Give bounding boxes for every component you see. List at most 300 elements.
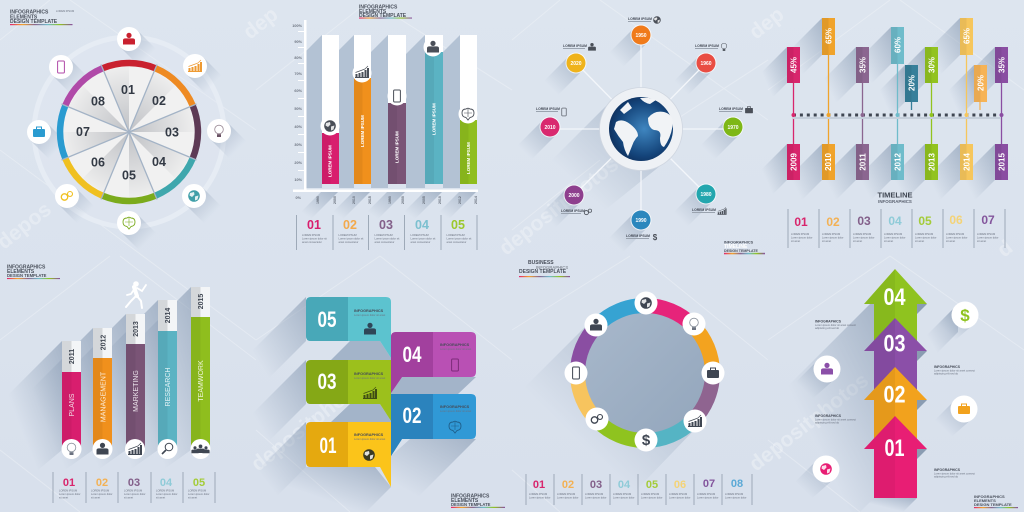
- legend row: Lorem ipsum dolor: [853, 236, 875, 240]
- title: business infographics: INFOGRAPHICS: [536, 265, 568, 270]
- runner figure: [126, 281, 146, 308]
- column 2014 research: 2014: [165, 308, 172, 323]
- legend row: LOREM IPSUM: [585, 492, 603, 496]
- legend row: LOREM IPSUM: [697, 492, 715, 496]
- arrow 01 pink: [864, 416, 927, 498]
- text block: lower left: [815, 414, 856, 424]
- ring segments: [578, 306, 712, 440]
- node 1950: [630, 24, 652, 46]
- heading: timeline infographics: INFOGRAPHICS: [878, 199, 912, 204]
- node shadows: [505, 28, 740, 265]
- year tag 2011: 2011: [858, 153, 868, 171]
- title: business infographics: DESIGN TEMPLATE: [519, 269, 567, 275]
- node labels: LOREM IPSUM: [695, 44, 719, 48]
- icon: gears: [61, 192, 72, 200]
- icon: magnifier: [162, 443, 173, 454]
- x axis labels: 2010: [352, 196, 356, 204]
- title: infographics timeline: INFOGRAPHICS: [724, 240, 754, 244]
- heading: timeline infographics: [878, 190, 912, 204]
- globe long shadow: [522, 100, 670, 238]
- y axis labels: 100%: [292, 24, 303, 28]
- legend row: sit amet: [124, 496, 133, 500]
- legend row: Lorem ipsum dolor: [188, 492, 210, 496]
- wedge numbers: [76, 83, 179, 182]
- arrow 03 purple: 03: [884, 330, 906, 358]
- title: infographics elements (bubbles): DESIGN TEMPLATE: [451, 502, 491, 507]
- tag 35% purple: [995, 47, 1008, 83]
- legend row: Lorem ipsum dolor: [156, 492, 178, 496]
- legend row: LOREM IPSUM: [613, 492, 631, 496]
- column 2012 management: MANAGEMENT: [100, 371, 108, 422]
- bar 2 orange: LOREM IPSUM: [360, 115, 365, 147]
- text block: upper left: INFOGRAPHICS: [815, 320, 842, 324]
- arrow 01 pink: 01: [884, 435, 904, 462]
- legend row: LOREM IPSUM: [124, 488, 142, 492]
- panel: timeline: [757, 18, 1008, 248]
- legend row: LOREM IPSUM: [446, 233, 465, 237]
- tag 30%: 30%: [928, 57, 936, 73]
- title: infographics elements (wheel): ELEMENTS: [10, 14, 38, 20]
- ring inner disc: [583, 311, 707, 435]
- icon: dollar: $: [642, 432, 651, 449]
- arrow shadows: [770, 300, 958, 512]
- title: infographics elements (wheel): DESIGN TEMPLATE: [10, 19, 58, 25]
- tag 20% orange: [974, 65, 987, 102]
- node 1960: [696, 52, 716, 74]
- timeline shadows: [757, 18, 995, 220]
- legend row: sit amet: [59, 496, 68, 500]
- bubble 02 blue: 02: [402, 403, 422, 428]
- title: infographics timeline: DESIGN TEMPLATE: [724, 249, 758, 253]
- icon: globe: [188, 190, 200, 202]
- bar 5 green: [458, 35, 478, 184]
- x axis labels: 1990: [388, 196, 392, 204]
- node 2020: 2020: [570, 61, 582, 67]
- timeline dotted axis: [792, 113, 1004, 119]
- legend row: sit amet: [791, 239, 800, 243]
- title: infographics elements (bars): [359, 4, 412, 19]
- icon: person: [96, 443, 108, 454]
- text block: upper left: adipiscing elit sed do: [815, 326, 840, 330]
- node labels: LOREM IPSUM: [626, 234, 650, 238]
- tag 30%: [925, 47, 938, 83]
- legend row: sit amet: [946, 239, 955, 243]
- legend row: 05: [918, 214, 932, 228]
- icon shadows: [30, 30, 254, 258]
- node labels: LOREM IPSUM: [719, 107, 743, 111]
- tag 20% orange: 20%: [976, 75, 986, 91]
- icon: person: [590, 319, 602, 330]
- x axis labels: 1990: [316, 196, 320, 204]
- node 1990: [630, 210, 652, 230]
- watermark text: depositphotos: [745, 369, 873, 476]
- legend row: [296, 215, 477, 250]
- year tag 2012: [891, 144, 904, 180]
- watermark text: d: [993, 236, 1017, 262]
- y axis labels: 60%: [294, 89, 303, 93]
- panel: percentage bar chart: [284, 4, 478, 250]
- legend row: Lorem ipsum dolor: [697, 496, 719, 500]
- legend row: [788, 209, 1005, 248]
- y axis labels: 10%: [294, 178, 303, 182]
- wedge numbers: 03: [165, 126, 179, 140]
- legend row: amet consectetur: [302, 240, 322, 244]
- bar shadows: [306, 35, 460, 188]
- legend row: LOREM IPSUM: [669, 492, 687, 496]
- y axis labels: 70%: [294, 72, 303, 76]
- tag 45%: [787, 47, 800, 83]
- bubble 01 yellow: Lorem ipsum dolor sit amet: [354, 437, 386, 441]
- text block: lower left: INFOGRAPHICS: [815, 414, 842, 418]
- legend row: Lorem ipsum dolor: [977, 236, 999, 240]
- year tag 2013: [925, 144, 938, 180]
- bar 4 teal: LOREM IPSUM: [432, 103, 436, 135]
- icon: brain: [123, 217, 135, 229]
- title: infographics elements (columns): INFOGRAPHICS: [7, 264, 46, 270]
- bubble 05 teal: [306, 297, 391, 358]
- legend row: LOREM IPSUM: [853, 232, 871, 236]
- year tag 2012: 2012: [894, 153, 902, 171]
- year tag 2014: [960, 144, 973, 180]
- bubble 03 green: INFOGRAPHICS: [354, 372, 384, 376]
- legend row: Lorem ipsum dolor: [59, 492, 81, 496]
- legend row: Lorem ipsum dolor: [91, 492, 113, 496]
- icon: bulb: [67, 443, 76, 455]
- circle: person: [814, 356, 840, 382]
- legend row: sit amet: [853, 239, 862, 243]
- column 2013 marketing: MARKETING: [133, 370, 140, 412]
- title: infographics elements (bubbles): ELEMENTS: [451, 498, 479, 504]
- legend row: 05: [193, 477, 205, 489]
- node 1990: 1990: [635, 218, 647, 224]
- legend row: Lorem ipsum dolor: [946, 236, 968, 240]
- text block: upper left: Lorem ipsum dolor sit amet consect: [815, 323, 856, 327]
- node 2020: [566, 52, 586, 74]
- tag 65%: 65%: [824, 28, 834, 44]
- legend row: amet consectetur: [338, 240, 359, 244]
- title: infographics elements (arrows): [974, 494, 1018, 508]
- title: infographics elements (bars): INFOGRAPHICS: [359, 4, 398, 10]
- node 2000: 2000: [568, 193, 580, 199]
- x axis labels: 2000: [333, 196, 337, 204]
- bubble 01 yellow: [306, 422, 391, 487]
- bubble 03 green: [306, 360, 391, 421]
- column 2012 management: 2012: [100, 335, 108, 350]
- column 2011 plans: 2011: [69, 349, 76, 364]
- node 2010: [540, 116, 560, 138]
- x axis labels: 2015: [368, 196, 372, 204]
- year tag 2015: [995, 144, 1008, 180]
- wedge numbers: 07: [76, 125, 90, 139]
- text block: upper right: Lorem ipsum dolor sit amet consect: [934, 368, 975, 372]
- bubble 02 blue: INFOGRAPHICS: [440, 405, 470, 409]
- bubble 04 magenta: 04: [402, 342, 422, 367]
- node labels: $: [653, 233, 658, 242]
- title: infographics elements (columns): DESIGN TEMPLATE: [7, 273, 47, 278]
- node labels: LOREM IPSUM: [563, 44, 587, 48]
- arrow 03 purple: [864, 318, 927, 395]
- legend row: amet consectetur: [410, 240, 431, 244]
- arrow 04 green: [864, 269, 927, 345]
- legend row: sit amet: [156, 496, 165, 500]
- connector lines: [550, 35, 733, 220]
- legend row: sit amet: [915, 239, 924, 243]
- tag 65%: [822, 18, 835, 55]
- y axis labels: 40%: [294, 125, 303, 129]
- text block: lower left: Lorem ipsum dolor sit amet consect: [815, 418, 856, 422]
- x axis labels: [316, 196, 478, 204]
- icon: bulb: [690, 318, 698, 330]
- bubble 05 teal: Lorem ipsum dolor sit amet: [354, 313, 386, 317]
- title: infographics elements (columns): ELEMENTS: [7, 269, 35, 275]
- icon: gears: [591, 414, 602, 423]
- x axis labels: 2010: [438, 196, 442, 204]
- halo ring: [34, 37, 224, 227]
- bubble 04 magenta: Lorem ipsum dolor sit amet: [440, 347, 472, 351]
- node labels: LOREM IPSUM: [628, 17, 652, 21]
- y axis labels: 30%: [294, 143, 303, 147]
- bubble 01 yellow: INFOGRAPHICS: [354, 433, 384, 437]
- panel: pie wheel infographic: [10, 9, 254, 258]
- x axis labels: 2005: [422, 196, 426, 204]
- legend row: 08: [731, 478, 743, 490]
- legend row: LOREM IPSUM: [977, 232, 995, 236]
- tag 35%: 35%: [858, 57, 868, 73]
- legend row: [526, 474, 752, 505]
- title: infographics elements (arrows): ELEMENTS: [974, 498, 996, 503]
- year tag 2009: [787, 144, 800, 180]
- legend row: Lorem ipsum dolor sit: [338, 236, 364, 240]
- circle: dollar: $: [960, 306, 970, 325]
- column 2011 plans: PLANS: [69, 393, 76, 416]
- bubble 03 green: 03: [318, 369, 336, 394]
- icon: team: [191, 445, 210, 453]
- year tag 2010: 2010: [824, 153, 833, 171]
- node labels: LOREM IPSUM: [536, 107, 560, 111]
- legend row: amet consectetur: [374, 240, 395, 244]
- legend row: 06: [674, 479, 686, 491]
- bubble shadows: [236, 297, 476, 512]
- legend row: 04: [415, 218, 429, 232]
- text block: lower right: adipiscing elit sed do: [934, 474, 959, 478]
- title: infographics timeline: TIMELINE: [724, 244, 748, 250]
- year tag 2009: 2009: [790, 153, 798, 171]
- legend row: 01: [533, 479, 545, 491]
- legend row: Lorem ipsum dolor: [725, 496, 747, 500]
- tag 60%: 60%: [894, 37, 902, 53]
- arrow 02 orange: [864, 367, 927, 440]
- legend row: Lorem ipsum dolor: [529, 496, 551, 500]
- y axis labels: 80%: [294, 56, 303, 60]
- legend row: sit amet: [884, 239, 893, 243]
- watermark text: depositphotos: [247, 369, 375, 476]
- legend row: 04: [160, 477, 173, 489]
- legend row: [53, 472, 215, 503]
- bubble 03 green: Lorem ipsum dolor sit amet: [354, 376, 386, 380]
- legend row: 03: [857, 214, 871, 228]
- x axis labels: 2012: [458, 196, 462, 204]
- title: infographics elements (arrows): INFOGRAPHICS: [974, 494, 1005, 499]
- globe: [600, 88, 682, 170]
- ring shadow: [500, 320, 698, 510]
- legend row: Lorem ipsum dolor sit: [302, 236, 327, 240]
- column 2014 research: RESEARCH: [165, 368, 172, 406]
- node 1960: 1960: [700, 61, 712, 67]
- text block: lower right: Lorem ipsum dolor sit amet consect: [934, 472, 975, 476]
- text block: lower left: adipiscing elit sed do: [815, 420, 840, 424]
- node labels: [536, 16, 753, 242]
- panel: speech bubbles: [236, 297, 505, 512]
- bar 3 mauve: [388, 35, 406, 184]
- y axis labels: 50%: [294, 107, 303, 111]
- x axis labels: 2000: [401, 196, 405, 204]
- legend row: Lorem ipsum dolor: [669, 496, 691, 500]
- y axis labels: 0%: [296, 196, 302, 200]
- timeline stems: [794, 55, 1002, 144]
- circle: briefcase: [950, 396, 978, 422]
- title: infographics timeline: [724, 240, 765, 254]
- legend row: LOREM IPSUM: [188, 488, 206, 492]
- legend row: 07: [703, 478, 715, 490]
- node 1980: 1980: [700, 192, 712, 198]
- node 1970: [722, 116, 744, 138]
- title: infographics elements (bubbles): [451, 494, 505, 508]
- year tag 2013: 2013: [928, 153, 936, 171]
- legend row: sit amet: [822, 239, 831, 243]
- legend row: 01: [794, 215, 808, 229]
- year tag 2011: [856, 144, 869, 180]
- legend row: LOREM IPSUM: [791, 232, 809, 236]
- legend row: LOREM IPSUM: [529, 492, 547, 496]
- legend row: 04: [618, 479, 631, 491]
- arrow 04 green: 04: [884, 284, 906, 311]
- title: infographics elements (wheel): [10, 9, 74, 25]
- wheel disc: [62, 65, 196, 199]
- column shadows: [2, 287, 191, 500]
- column 2011 plans: [62, 341, 81, 448]
- column 2012 management: [93, 328, 112, 448]
- tag 65% yellow: [960, 18, 973, 55]
- legend row: LOREM IPSUM: [302, 233, 320, 237]
- tag 20% teal: 20%: [908, 75, 916, 91]
- watermark text: depositphotos: [495, 153, 623, 260]
- tag 20% teal: [905, 65, 918, 102]
- title: infographics elements (columns): [7, 264, 60, 279]
- node labels: LOREM IPSUM: [692, 208, 716, 212]
- bar 1 pink: LOREM IPSUM: [328, 145, 332, 177]
- wedge numbers: 02: [152, 94, 166, 108]
- legend row: LOREM IPSUM: [725, 492, 743, 496]
- icon: briefcase: [33, 127, 45, 137]
- y axis labels: [292, 24, 303, 200]
- node 1970: 1970: [727, 125, 739, 131]
- legend row: 03: [379, 218, 393, 232]
- legend row: LOREM IPSUM: [374, 233, 393, 237]
- coloured rim segments: [60, 63, 198, 201]
- text block: upper right: [934, 365, 975, 376]
- tag 45%: 45%: [790, 57, 798, 73]
- legend row: 02: [96, 477, 108, 489]
- legend row: 02: [343, 218, 357, 232]
- node 2000: [564, 184, 584, 206]
- column 2015 teamwork: TEAMWORK: [198, 360, 205, 402]
- node labels: LOREM IPSUM: [561, 209, 585, 213]
- wedge shading: [63, 66, 195, 198]
- legend row: 02: [826, 215, 840, 229]
- icon: chart: [188, 60, 202, 72]
- legend row: 01: [63, 477, 75, 489]
- bar 1 pink: [320, 35, 340, 184]
- legend row: Lorem ipsum dolor: [641, 496, 663, 500]
- panel: rising columns: [2, 264, 215, 503]
- heading: timeline infographics: TIMELINE: [878, 190, 912, 200]
- arrow 02 orange: 02: [884, 382, 906, 408]
- panel: globe radial timeline: [505, 16, 765, 265]
- y axis labels: 90%: [294, 40, 303, 44]
- icon: globe: [640, 297, 652, 309]
- icon: bulb: [215, 125, 223, 137]
- legend row: Lorem ipsum dolor: [613, 496, 635, 500]
- legend row: LOREM IPSUM: [641, 492, 659, 496]
- node 1950: 1950: [635, 33, 647, 39]
- legend row: Lorem ipsum dolor: [915, 236, 937, 240]
- watermark text: dep: [745, 3, 789, 44]
- node 1980: [696, 184, 716, 204]
- icon: person: [123, 33, 135, 44]
- column 2013 marketing: 2013: [133, 321, 140, 337]
- tag 60%: [891, 27, 904, 64]
- wedge numbers: 08: [91, 94, 105, 108]
- y axis labels: 20%: [294, 161, 303, 165]
- year tag 2010: [822, 144, 835, 180]
- legend row: 04: [888, 214, 902, 228]
- legend row: LOREM IPSUM: [410, 233, 429, 237]
- bar 3 mauve: LOREM IPSUM: [394, 131, 400, 163]
- text block: upper right: INFOGRAPHICS: [934, 365, 961, 369]
- text block: upper left: [815, 320, 856, 330]
- title: infographics elements (arrows): DESIGN TEMPLATE: [974, 502, 1012, 507]
- bar 5 green: LOREM IPSUM: [466, 142, 471, 174]
- legend row: 01: [307, 218, 321, 232]
- icon: briefcase: [707, 368, 719, 378]
- bubble 02 blue: [391, 394, 476, 456]
- title: infographics elements (bars): ELEMENTS: [359, 9, 387, 15]
- title: infographics elements (wheel): INFOGRAPHICS: [10, 10, 49, 16]
- panel: circular ring diagram: [500, 260, 752, 510]
- column 2014 research: [158, 300, 177, 448]
- wedge numbers: 04: [152, 155, 166, 169]
- legend row: LOREM IPSUM: [91, 488, 109, 492]
- legend row: LOREM IPSUM: [822, 232, 840, 236]
- year tag 2015: 2015: [998, 153, 1006, 171]
- legend row: Lorem ipsum dolor: [822, 236, 844, 240]
- tag 65% yellow: 65%: [962, 28, 972, 44]
- legend row: 06: [949, 213, 963, 227]
- legend row: Lorem ipsum dolor: [791, 236, 813, 240]
- legend row: Lorem ipsum dolor: [585, 496, 607, 500]
- legend row: LOREM IPSUM: [59, 488, 77, 492]
- legend row: Lorem ipsum dolor sit: [446, 236, 472, 240]
- legend row: sit amet: [91, 496, 100, 500]
- legend row: amet consectetur: [446, 240, 467, 244]
- text block: lower right: INFOGRAPHICS: [934, 468, 961, 472]
- legend row: sit amet: [188, 496, 197, 500]
- bubble 05 teal: 05: [318, 307, 336, 332]
- legend row: 03: [128, 477, 140, 489]
- bubble 04 magenta: INFOGRAPHICS: [440, 343, 470, 347]
- title: business infographics: [519, 260, 570, 277]
- x axis labels: 2014: [474, 196, 478, 204]
